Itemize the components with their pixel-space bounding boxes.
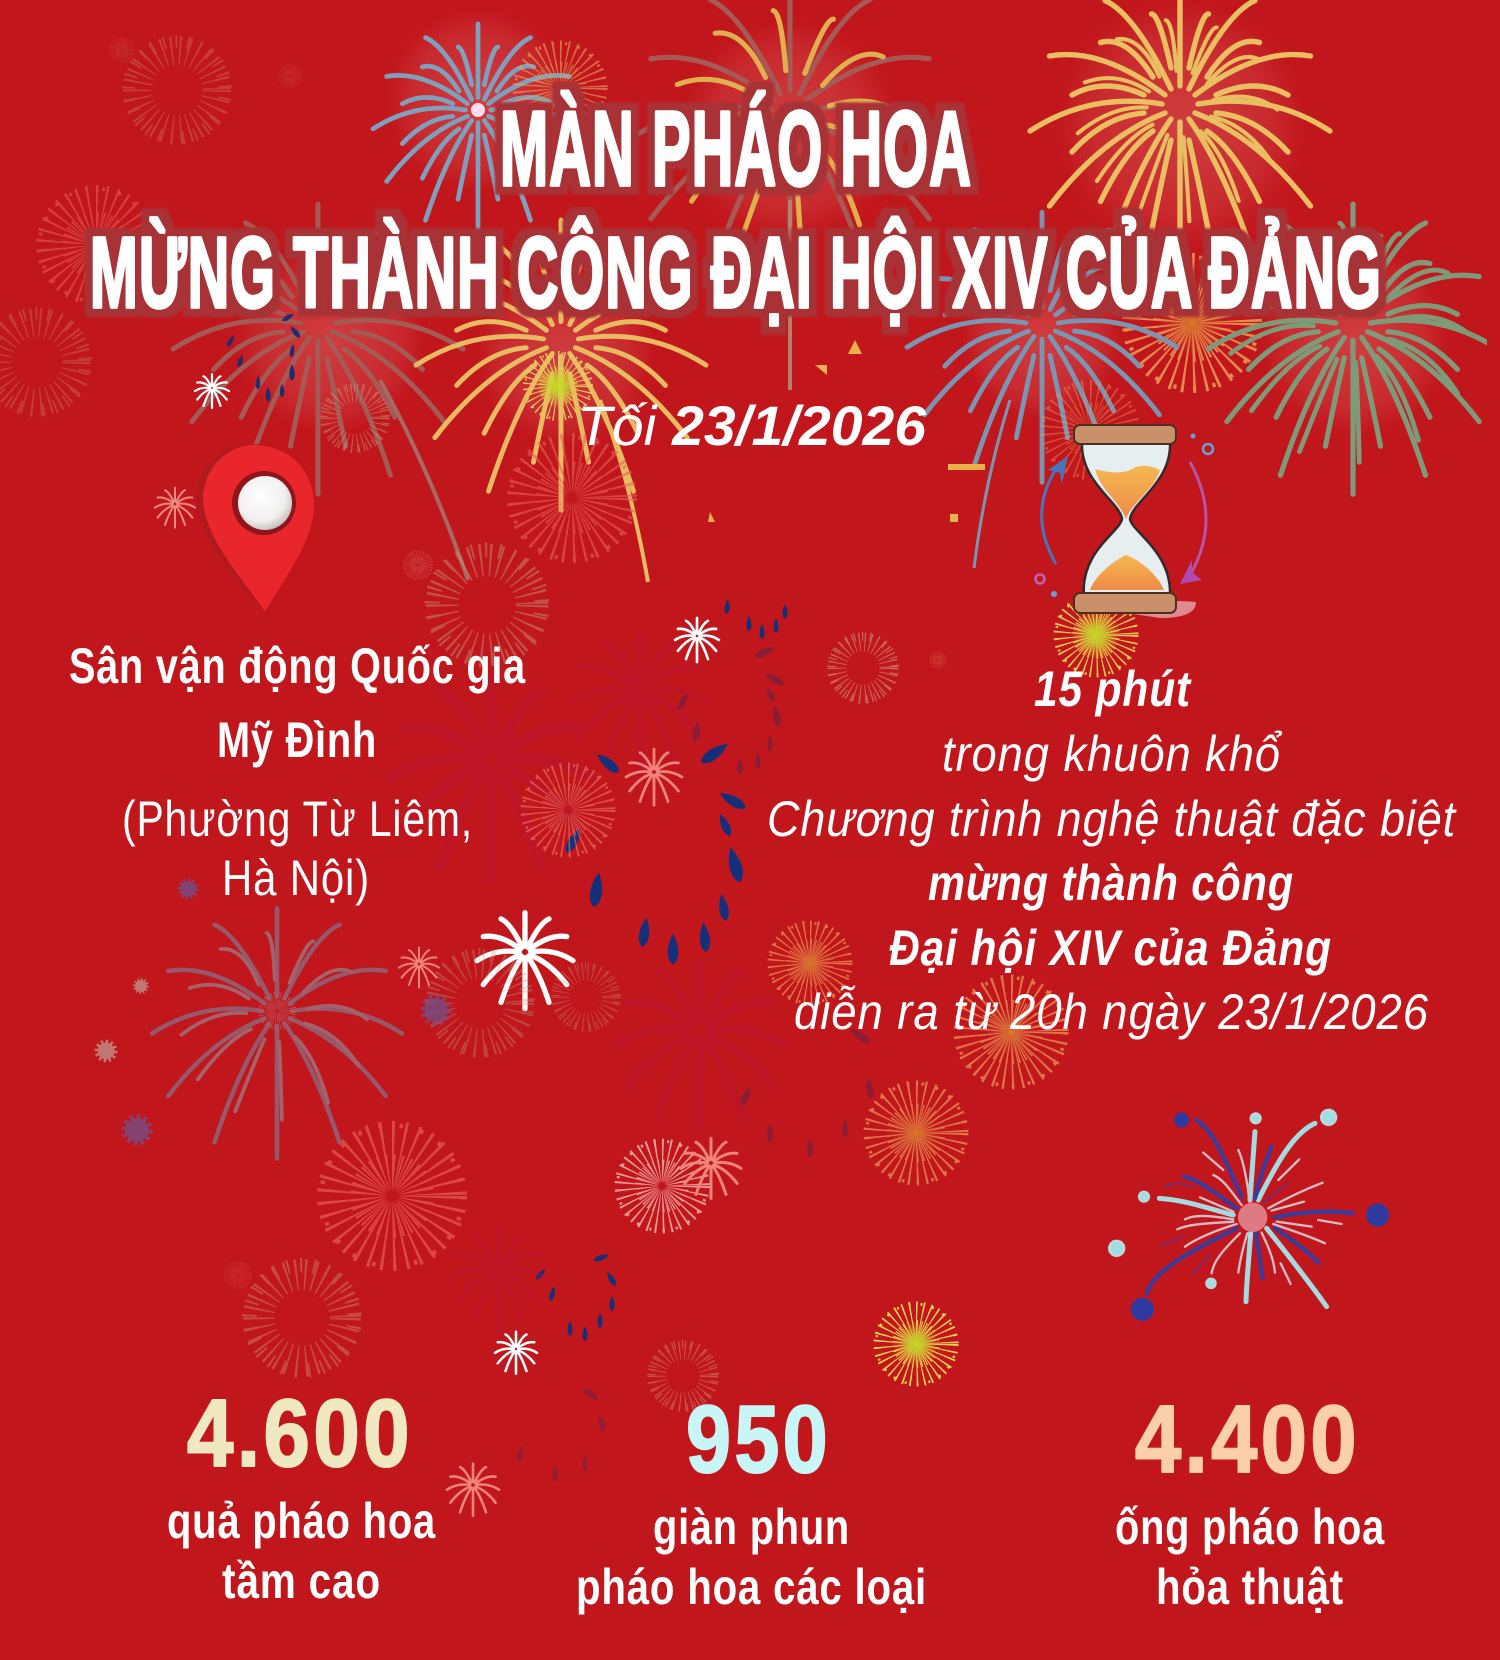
faint firework top left: [110, 38, 301, 138]
lower navy drop firework: [448, 1229, 618, 1341]
pink firework middle: [626, 749, 682, 805]
stat: fountain racks: giàn phun: [653, 1499, 850, 1555]
stat: pyrotechnic tubes: hỏa thuật: [1156, 1559, 1344, 1615]
duration and programme text: diễn ra từ 20h ngày 23/1/2026: [794, 984, 1429, 1040]
small fireworks lower centre: [447, 1332, 715, 1516]
small group near white firework: [399, 948, 617, 1051]
stat: pyrotechnic tubes: ống pháo hoa: [1115, 1499, 1385, 1555]
tan firework lower left: [249, 1265, 355, 1371]
stat: fountain racks: pháo hoa các loại: [576, 1559, 927, 1615]
stat: high-altitude shells: 4.600: [187, 1380, 413, 1487]
stat: fountain racks: [576, 1386, 927, 1615]
title: MÀN PHÁO HOA: [500, 90, 972, 208]
duration and programme text: trong khuôn khổ: [942, 726, 1283, 782]
faint drop ring centre right: [738, 1025, 875, 1158]
yellow firework top right: [1030, 0, 1330, 281]
venue text: (Phường Từ Liêm,: [122, 791, 473, 847]
stat: pyrotechnic tubes: 4.400: [1135, 1386, 1360, 1493]
small white firework left: [195, 374, 229, 408]
salmon firework lower left: [225, 1126, 462, 1288]
brown and yellow firework top centre: [515, 0, 950, 390]
title: [90, 90, 1382, 329]
stat: pyrotechnic tubes: [1115, 1386, 1385, 1615]
venue text: Hà Nội): [222, 850, 370, 906]
muted blue firework left: [97, 881, 449, 1158]
white firework top middle: [675, 618, 719, 662]
white and pink firework lower centre: [617, 1138, 741, 1231]
orange firework right: [1126, 257, 1258, 389]
small burst at hourglass top: [1043, 383, 1137, 477]
duration and programme text: Đại hội XIV của Đảng: [889, 920, 1332, 976]
small pink firework left: [155, 488, 195, 528]
blue firework right: [907, 212, 1177, 568]
icon: location pin: [196, 444, 314, 612]
navy drops near brown firework: [225, 312, 302, 402]
coloured firework lower right: [1110, 1110, 1387, 1319]
duration and programme text: 15 phút: [1034, 661, 1192, 717]
stat: high-altitude shells: [167, 1380, 436, 1609]
red fine firework left: [0, 189, 152, 410]
date: Tối 23/1/2026: [577, 394, 927, 457]
lime firework lower centre: [876, 1304, 956, 1384]
confetti: [708, 340, 985, 522]
tan firework below brown: [404, 550, 542, 660]
navy drop firework: [563, 599, 787, 965]
venue text: [69, 638, 526, 906]
faint drops lower centre: [516, 1386, 607, 1482]
green firework far right: [1208, 204, 1498, 494]
venue text: Mỹ Đình: [217, 712, 377, 768]
stat: high-altitude shells: quả pháo hoa: [167, 1493, 436, 1549]
stat: high-altitude shells: tầm cao: [222, 1553, 381, 1609]
blue firework top: [373, 8, 583, 234]
duration and programme text: mừng thành công: [928, 855, 1294, 911]
tan firework middle right: [831, 636, 946, 700]
stat: fountain racks: 950: [686, 1386, 831, 1493]
large white firework: [477, 913, 573, 1009]
venue text: Sân vận động Quốc gia: [69, 638, 526, 694]
salmon firework middle: [523, 765, 613, 855]
faint crimson firework middle: [391, 633, 785, 1130]
yellow firework lower centre: [416, 220, 706, 582]
orange fireworks centre right: [770, 923, 1065, 1182]
lime burst under hourglass: [1056, 595, 1136, 675]
duration and programme text: [767, 661, 1457, 1040]
brown firework left: [173, 204, 468, 580]
icon: hourglass: [1036, 425, 1213, 618]
